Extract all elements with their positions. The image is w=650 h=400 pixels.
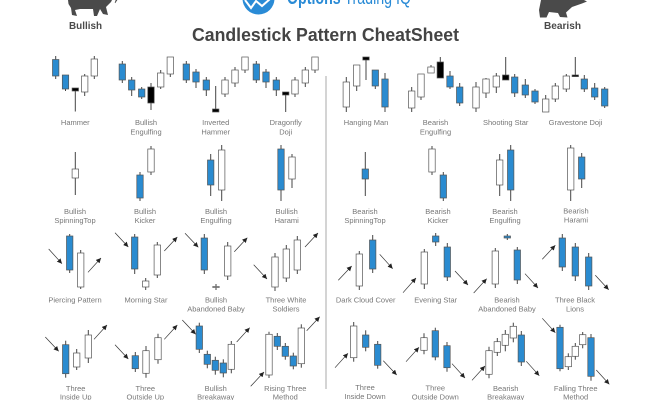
pattern: Dark Cloud Cover [336,235,396,304]
pattern: Bullish Engulfing: Engulfing [130,128,162,136]
pattern: Morning Star: Morning Star [125,296,168,304]
icon: bear [539,0,587,18]
pattern: Bearish Breakaway: Bearish [493,384,518,393]
pattern: Bearish Breakaway [472,323,539,400]
pattern: Shooting Star: Shooting Star [483,118,529,127]
pattern: Bullish Kicker [134,146,156,225]
pattern: Three White Soldiers [254,233,318,314]
pattern: Hammer [52,56,98,127]
pattern: Three Inside Down [335,322,397,400]
pattern: Three White Soldiers: Soldiers [272,305,300,314]
pattern: Bearish Engulfing: Bearish [423,118,448,127]
pattern: Hammer: Hammer [61,118,90,127]
pattern: Bearish Engulfing: Engulfing [420,128,451,136]
pattern: Bullish Kicker: Kicker [135,216,156,225]
pattern: Bullish Harami: Harami [275,216,299,225]
pattern: Inverted Hammer [183,57,248,136]
pattern: Bullish Engulfing [119,57,174,136]
pattern: Three Outside Up: Three [136,384,155,393]
pattern: Gravestone Doji: Gravestone Doji [549,118,603,127]
pattern: Three Inside Up: Three [66,384,85,393]
pattern: Hanging Man: Hanging Man [344,118,388,127]
pattern: Bullish Breakaway [182,320,250,400]
pattern: Rising Three Method [251,317,320,400]
pattern: Bearish Kicker: Kicker [428,216,449,225]
pattern: Three White Soldiers: Three White [266,296,306,304]
pattern: Bearish Abandoned Baby: Abandoned Baby [478,305,536,314]
pattern: Hanging Man [343,57,388,127]
pattern: Three Inside Up [45,325,107,400]
pattern: Bearish SpinningTop: Bearish [352,207,378,216]
pattern: Bearish Engulfing [408,57,463,136]
pattern: Bearish Harami [563,145,589,225]
pattern: Dragonfly Doji: Dragonfly [270,118,302,127]
pattern: Bearish Harami: Harami [564,216,588,225]
pattern: Three Outside Down [406,328,465,400]
pattern: Evening Star [403,233,468,304]
pattern: Bullish Harami: Bullish [276,207,298,216]
pattern: Inverted Hammer: Inverted [202,118,229,127]
pattern: Evening Star: Evening Star [414,296,458,304]
heading: Bullish: Bullish [69,20,102,32]
pattern: Three Black Lions [542,234,609,314]
pattern: Bearish Harami: Bearish [563,206,589,216]
pattern: Three Inside Down: Three [355,383,375,392]
heading: Bearish: Bearish [544,20,581,32]
pattern: Piercing Pattern [48,234,102,304]
pattern: Bullish SpinningTop [54,152,96,225]
pattern: Shooting Star [473,57,538,127]
pattern: Bearish Abandoned Baby [474,234,538,314]
pattern: Bullish Engulfing: Bullish [135,118,157,127]
pattern: Bullish Abandoned Baby [185,233,247,314]
icon: bull [68,0,117,16]
pattern: Falling Three Method: Falling Three [554,384,598,393]
pattern: Three Black Lions: Lions [566,305,584,314]
pattern: Bullish Breakaway: Bullish [205,384,227,393]
pattern: Dragonfly Doji: Doji [279,128,292,136]
pattern: Three Outside Up [115,325,177,400]
pattern: Bearish Kicker [425,146,451,225]
pattern: Dragonfly Doji [253,57,318,136]
pattern: Bearish SpinningTop [344,152,386,225]
title: Candlestick Pattern CheatSheet [192,24,459,45]
pattern: Bearish Kicker: Bearish [425,207,451,216]
pattern: Dark Cloud Cover: Dark Cloud Cover [336,296,396,304]
pattern: Gravestone Doji [542,57,608,127]
logo icon [242,0,274,14]
pattern: Bearish SpinningTop: SpinningTop [344,216,386,225]
pattern: Bullish Engulfing (two candle): Bullish [205,207,227,216]
pattern: Bullish SpinningTop: Bullish [64,207,86,216]
pattern: Bullish Abandoned Baby: Bullish [205,296,227,304]
pattern: Bullish Engulfing (two candle): Engulfing [200,216,232,225]
pattern: Bullish Harami [275,145,299,225]
divider [325,76,327,389]
pattern: Bearish Abandoned Baby: Bearish [494,296,520,304]
pattern: Bullish Abandoned Baby: Abandoned Baby [187,305,245,314]
pattern: Bearish Engulfing (two candle) [489,145,521,225]
pattern: Piercing Pattern: Piercing Pattern [48,296,102,304]
pattern: Morning Star [115,233,177,304]
pattern: Bullish Engulfing (two candle) [200,145,232,225]
pattern: Inverted Hammer: Hammer [201,128,231,136]
pattern: Bearish Engulfing (two candle): Engulfing [489,216,521,225]
pattern: Falling Three Method [542,318,609,400]
pattern: Three Outside Down: Three [426,384,445,392]
pattern: Rising Three Method: Rising Three [264,384,306,393]
pattern: Bullish SpinningTop: SpinningTop [54,216,96,225]
pattern: Three Black Lions: Three Black [555,296,595,304]
pattern: Bearish Engulfing (two candle): Bearish [492,207,518,216]
pattern: Bullish Kicker: Bullish [134,207,156,216]
